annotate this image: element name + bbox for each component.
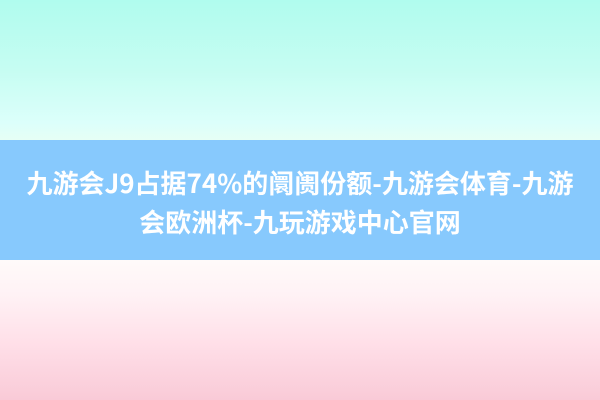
title: 会欧洲杯-九玩游戏中心官网 xyxy=(139,203,461,240)
background: pink gradient bottom panel xyxy=(0,260,600,400)
title: 九游会J9占据74%的阛阓份额-九游会体育-九游 xyxy=(26,164,574,201)
background: mint gradient top panel xyxy=(0,0,600,140)
panel: blue title band xyxy=(0,140,600,260)
title xyxy=(26,164,574,240)
